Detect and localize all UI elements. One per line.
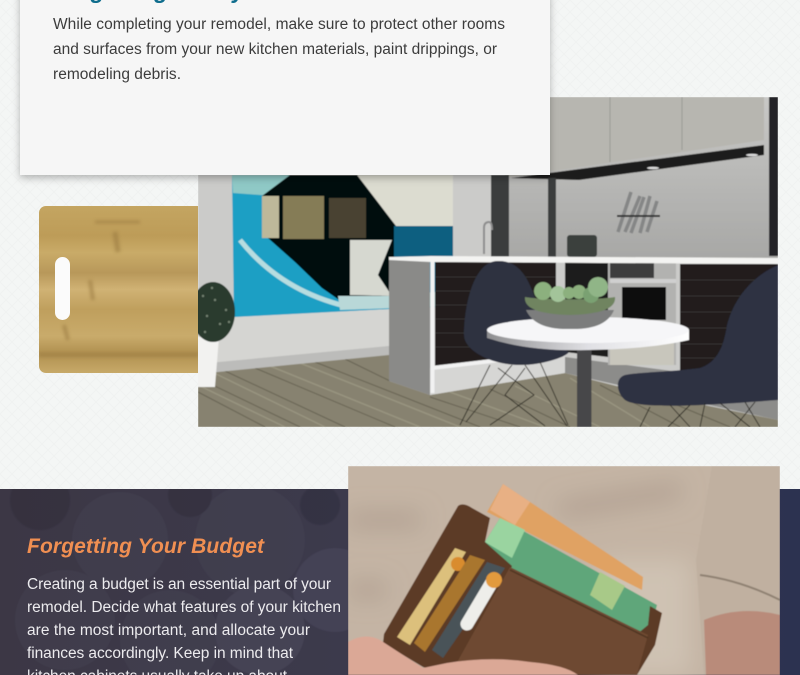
card gold xyxy=(397,548,466,645)
green banknote xyxy=(485,518,657,640)
potted plant xyxy=(198,282,236,388)
cabinet seams xyxy=(610,97,682,162)
left chair xyxy=(460,261,569,426)
floor highlights xyxy=(198,363,650,427)
under-cabinet shadow xyxy=(511,145,764,180)
budget body text: remodel. Decide what features of your kitchen xyxy=(27,599,341,616)
table pedestal xyxy=(577,345,592,427)
floor planks xyxy=(198,359,730,427)
forearm xyxy=(704,611,780,675)
budget body text: are the most important, and allocate your xyxy=(27,622,310,639)
budget body text xyxy=(27,576,341,675)
plinth right xyxy=(565,357,778,420)
dark columns xyxy=(491,97,778,258)
budget body text: finances accordingly. Keep in mind that xyxy=(27,645,294,662)
card brown xyxy=(414,555,485,652)
wallet front pocket xyxy=(450,567,648,675)
cutting board xyxy=(39,206,198,373)
faucet xyxy=(484,222,492,254)
upper cabinets xyxy=(505,97,764,178)
card body text: remodeling debris. xyxy=(53,66,181,83)
painting xyxy=(232,175,453,317)
orange banknote xyxy=(487,484,643,590)
black cabinets xyxy=(435,262,778,372)
card dark xyxy=(432,562,505,658)
budget body text: Creating a budget is an essential part of your xyxy=(27,576,331,593)
textured page background xyxy=(0,0,800,489)
sweater xyxy=(348,466,712,675)
card body text: and surfaces from your new kitchen materials, paint drippings, or xyxy=(53,41,497,58)
kitchen floor xyxy=(198,353,778,427)
card body text: While completing your remodel, make sure to protect other rooms xyxy=(53,16,505,33)
wallet right corner xyxy=(630,606,662,675)
countertop xyxy=(389,256,778,264)
right chair xyxy=(618,265,778,427)
oven xyxy=(608,262,676,365)
wallet left leather xyxy=(383,504,512,675)
wall below painting xyxy=(198,310,388,362)
text card xyxy=(20,0,550,175)
counter frame xyxy=(430,261,498,394)
sweater shading xyxy=(348,490,690,675)
backsplash xyxy=(508,123,778,258)
card body text xyxy=(53,16,505,83)
hand xyxy=(348,636,578,675)
counter side panel xyxy=(389,258,430,395)
budget heading: Forgetting Your Budget xyxy=(27,535,265,558)
sleeve xyxy=(699,573,780,602)
toaster xyxy=(567,235,597,257)
fruit bowl xyxy=(525,277,615,329)
wallet photo xyxy=(348,466,780,675)
budget band with coins xyxy=(0,470,800,675)
knife rack xyxy=(617,192,660,233)
baseboard xyxy=(216,346,390,373)
kitchen wall xyxy=(198,175,756,416)
kitchen photo xyxy=(191,97,778,427)
plinth front xyxy=(430,354,565,395)
table top xyxy=(487,317,689,350)
pocket stitching xyxy=(510,570,648,638)
